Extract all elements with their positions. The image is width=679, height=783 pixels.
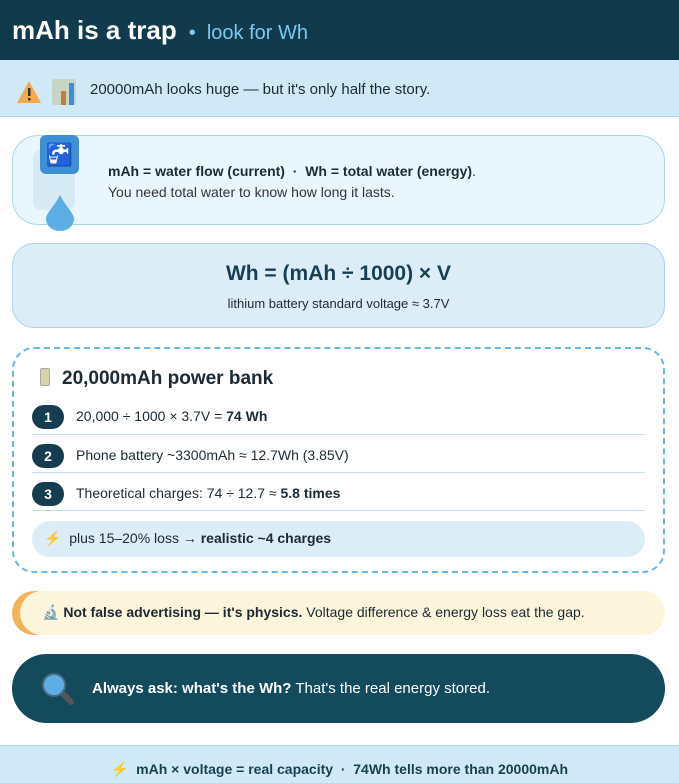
banner text: 20000mAh looks huge — but it's only half the story. (90, 81, 430, 98)
step 3: Theoretical charges: 74 ÷ 12.7 ≈ 5.8 times (76, 485, 340, 501)
step 1: 20,000 ÷ 1000 × 3.7V = 74 Wh (76, 408, 267, 424)
formula note: lithium battery standard voltage ≈ 3.7V (228, 296, 449, 311)
panel: water analogy (12, 135, 665, 225)
callout: physics (12, 591, 665, 635)
formula heading: Wh = (mAh ÷ 1000) × V (226, 262, 451, 285)
step 2: Phone battery ~3300mAh ≈ 12.7Wh (3.85V) (76, 447, 349, 463)
banner (0, 60, 679, 117)
step 3: 3 (44, 486, 52, 502)
example heading: 20,000mAh power bank (62, 368, 273, 389)
loss note (32, 521, 645, 557)
step 2: 2 (44, 448, 52, 464)
physics text: 🔬 Not false advertising — it's physics. Voltage difference & energy loss eat the gap. (42, 604, 585, 620)
icon: chart (52, 79, 76, 105)
footer (0, 745, 679, 783)
header (0, 0, 679, 60)
icon: tap and drop (33, 135, 79, 231)
step 1: 1 (44, 409, 52, 425)
ask text: Always ask: what's the Wh? That's the real energy stored. (92, 680, 490, 697)
analogy text: mAh = water flow (current) · Wh = total water (energy). (108, 163, 476, 179)
icon: warning (17, 81, 41, 103)
callout: always ask (12, 654, 665, 723)
step 3 (32, 479, 645, 511)
footer text: ⚡ mAh × voltage = real capacity · 74Wh tells more than 20000mAh (111, 761, 568, 777)
panel: formula (12, 243, 665, 328)
loss note: ⚡ plus 15–20% loss → realistic ~4 charges (44, 530, 331, 546)
step 2 (32, 441, 645, 473)
title: mAh is a trap • look for Wh (12, 15, 308, 45)
icon: tap and drop: 🚰 (46, 142, 73, 167)
step 1 (32, 403, 645, 435)
analogy text (108, 163, 476, 200)
analogy text: You need total water to know how long it lasts. (108, 184, 395, 200)
icon: magnifier (42, 673, 74, 705)
panel: power bank example (12, 347, 665, 573)
